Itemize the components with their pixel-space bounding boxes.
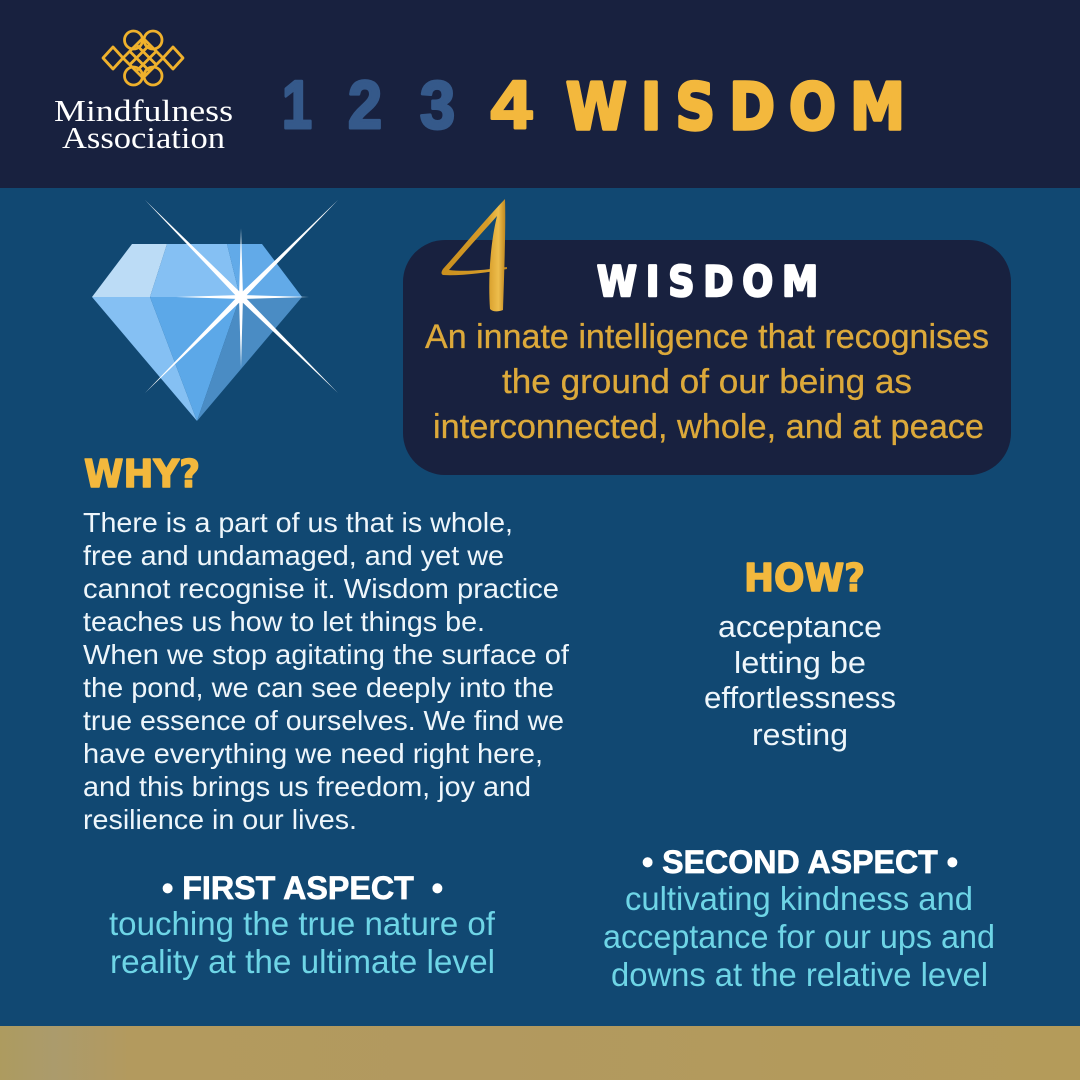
panel definition text: An innate intelligence that recognises [425,318,989,356]
text block: how list: acceptance [718,609,882,644]
header title: 4 WISDOM: WISDOM [566,71,905,145]
text block: how list: effortlessness [704,680,896,715]
text block: why paragraph: free and undamaged, and yet we [83,540,504,571]
text block: how list [704,609,896,752]
footer band [0,1026,1080,1080]
panel: wisdom definition [403,240,1011,475]
header numbers 1 2 3: 2 [348,67,382,143]
second aspect heading: • SECOND ASPECT • [642,844,958,880]
text block: why paragraph: true essence of ourselves. We find we [83,705,564,736]
logo wordmark: Mindfulness [54,93,233,128]
text block: why paragraph: There is a part of us that is whole, [83,507,513,538]
logo wordmark: Association [62,120,226,155]
first aspect [109,870,496,980]
text block: why paragraph: cannot recognise it. Wisdom practice [83,573,559,604]
panel heading: WISDOM: WISDOM [597,258,818,307]
header numbers 1 2 3: 3 [420,67,455,143]
text block: why paragraph: resilience in our lives. [83,804,357,835]
second aspect description: cultivating kindness and [625,880,973,917]
first aspect description: touching the true nature of [109,905,496,942]
first aspect description: reality at the ultimate level [110,943,495,980]
text block: why paragraph: When we stop agitating the surface of [83,639,569,670]
header numbers 1 2 3: 1 [282,67,312,143]
second aspect [603,844,995,993]
text block: how list: resting [752,717,848,752]
icon: endless knot [103,31,183,85]
first aspect heading: • FIRST ASPECT • [162,870,443,906]
heading: WHY?: WHY? [84,452,200,496]
logo: Mindfulness Association [54,31,233,155]
first aspect description [109,905,496,980]
text block: why paragraph: and this brings us freedom, joy and [83,771,531,802]
logo wordmark [54,93,233,155]
text block: why paragraph: teaches us how to let things be. [83,606,485,637]
panel definition text: the ground of our being as [502,363,912,401]
second aspect description: acceptance for our ups and [603,918,995,955]
header numbers 1 2 3 [282,67,455,143]
text block: why paragraph: have everything we need right here, [83,738,543,769]
header title: 4 WISDOM: 4 [491,67,532,143]
second aspect description [603,880,995,993]
panel definition text: interconnected, whole, and at peace [433,408,984,446]
heading: HOW?: HOW? [744,556,865,600]
text block: why paragraph: the pond, we can see deeply into the [83,672,554,703]
text block: why paragraph [83,507,569,835]
icon: sparkling diamond [92,200,338,421]
panel definition text [425,318,989,446]
text block: how list: letting be [734,645,866,680]
header band [0,0,1080,188]
body background [0,188,1080,1026]
second aspect description: downs at the relative level [611,956,988,993]
icon: gold numeral 4 [442,199,507,311]
